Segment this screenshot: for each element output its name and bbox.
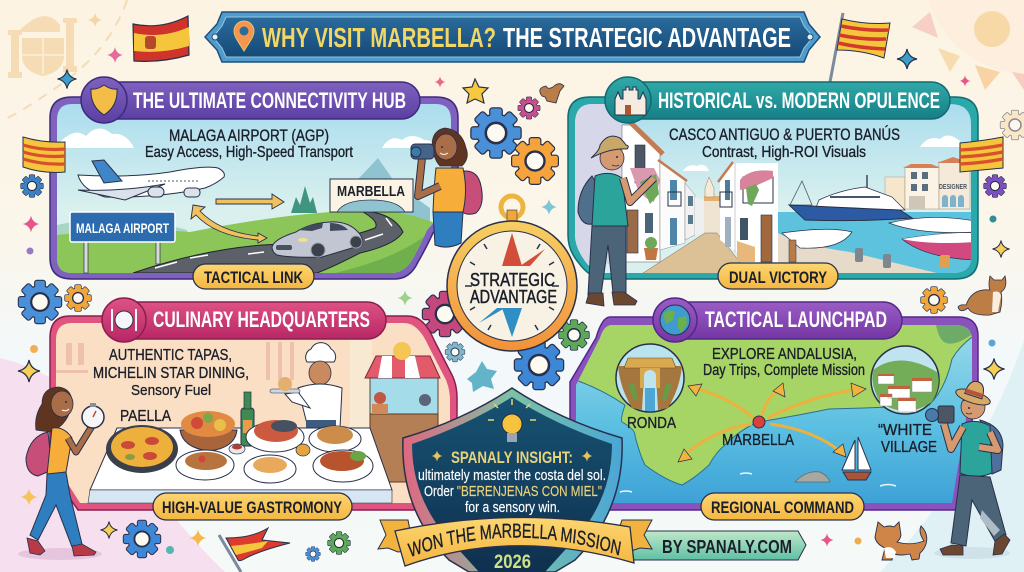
table bbox=[88, 428, 392, 503]
pill: regional command: REGIONAL COMMAND bbox=[711, 498, 854, 517]
panel: connectivity hub: Easy Access, High-Speed Transport bbox=[145, 144, 354, 161]
sign: Marbella: MARBELLA bbox=[337, 184, 405, 200]
heading text: CASCO ANTIGUO & PUERTO BANÚS bbox=[669, 125, 900, 144]
pill: high-value gastronomy bbox=[153, 493, 352, 520]
flag: Catalan left bbox=[23, 137, 65, 172]
chef bbox=[270, 343, 342, 430]
sign: Marbella bbox=[330, 179, 413, 212]
coat of arms watermark bbox=[8, 16, 77, 78]
panel: culinary headquarters: MICHELIN STAR DINING, bbox=[93, 365, 249, 382]
callout: spanaly insight shield: for a sensory win. bbox=[465, 500, 560, 516]
icon: map pin bbox=[234, 21, 254, 51]
compass bbox=[447, 196, 577, 351]
map labels: VILLAGE bbox=[881, 439, 937, 456]
traveler: woman with stopwatch bbox=[18, 387, 104, 560]
pill: dual victory bbox=[718, 263, 838, 289]
pill: dual victory: DUAL VICTORY bbox=[729, 268, 828, 287]
route arrows bbox=[682, 388, 860, 458]
traveler: guide with hat bbox=[578, 136, 654, 306]
map labels: RONDA bbox=[627, 415, 676, 432]
map labels: MARBELLA bbox=[722, 432, 794, 449]
callout: spanaly insight shield bbox=[403, 388, 622, 572]
compass: STRATEGIC bbox=[470, 269, 555, 290]
cat: top right bbox=[958, 276, 1006, 315]
insight text: SPANALY INSIGHT: bbox=[451, 448, 573, 467]
banner: won the marbella mission: WON THE MARBELLA MISSION bbox=[407, 524, 621, 556]
header pill bbox=[653, 298, 902, 342]
map labels: “WHITE bbox=[878, 422, 932, 439]
heading text: EXPLORE ANDALUSIA, bbox=[712, 346, 857, 363]
ribbon: by spanaly.com bbox=[625, 531, 806, 560]
heading text: AUTHENTIC TAPAS, bbox=[109, 347, 232, 364]
title text: WHY VISIT MARBELLA? bbox=[262, 22, 496, 53]
callout: spanaly insight shield: ultimately master the costa del sol. bbox=[418, 468, 606, 484]
pill: tactical link bbox=[193, 264, 314, 289]
heading text: MALAGA AIRPORT (AGP) bbox=[169, 127, 329, 145]
flag: Spain bottom pennant bbox=[219, 528, 290, 572]
header pill: THE ULTIMATE CONNECTIVITY HUB bbox=[133, 88, 406, 113]
pill: high-value gastronomy: HIGH-VALUE GASTROMONY bbox=[162, 498, 343, 517]
flag: Catalan right bbox=[960, 137, 1003, 172]
panel: tactical launchpad bbox=[570, 298, 980, 520]
icon: lightbulb bbox=[488, 399, 536, 442]
map inset: ronda bbox=[616, 344, 684, 412]
panel: culinary headquarters: Sensory Fuel bbox=[131, 382, 211, 399]
pill: regional command bbox=[701, 493, 864, 520]
compass: ADVANTAGE bbox=[470, 286, 557, 307]
panel: culinary headquarters: PAELLA bbox=[120, 408, 172, 425]
marina bbox=[778, 157, 975, 275]
panel: connectivity hub bbox=[50, 77, 460, 289]
panel: tactical launchpad: Day Trips, Complete Mission bbox=[703, 362, 865, 379]
panel: historical vs modern bbox=[568, 77, 978, 289]
food bbox=[106, 392, 373, 483]
pill: tactical link: TACTICAL LINK bbox=[204, 268, 304, 287]
header pill: TACTICAL LAUNCHPAD bbox=[705, 307, 887, 332]
ribbon: by spanaly.com: BY SPANALY.COM bbox=[662, 537, 792, 557]
sailboat bbox=[842, 437, 871, 480]
cat: bottom bbox=[875, 522, 927, 560]
map inset: white village bbox=[871, 346, 939, 414]
marbella dot bbox=[753, 416, 765, 428]
plane bbox=[78, 160, 224, 200]
rock bbox=[795, 472, 830, 482]
sign: Malaga Airport bbox=[70, 212, 175, 273]
sign: Malaga Airport: MALAGA AIRPORT bbox=[76, 221, 170, 236]
header pill bbox=[102, 298, 386, 342]
title banner: THE STRATEGIC ADVANTAGE bbox=[503, 22, 791, 53]
callout: spanaly insight shield: Order "BERENJENAS CON MIEL" bbox=[424, 484, 602, 500]
decorative gears bbox=[19, 97, 1024, 561]
header pill bbox=[81, 77, 420, 123]
storefront label: DESIGNER bbox=[939, 182, 967, 191]
traveler: photographer bbox=[411, 128, 482, 247]
stall bbox=[365, 342, 440, 482]
panel: culinary headquarters bbox=[50, 298, 457, 520]
header pill bbox=[605, 77, 950, 123]
old town bbox=[622, 122, 778, 275]
road bbox=[133, 212, 403, 273]
trees bbox=[291, 186, 317, 213]
clouds bbox=[920, 135, 960, 147]
map labels bbox=[627, 415, 937, 456]
flag: Catalan top right with pole bbox=[830, 13, 890, 82]
hills bbox=[57, 212, 434, 273]
title banner bbox=[205, 12, 820, 62]
header pill: CULINARY HEADQUARTERS bbox=[153, 307, 370, 332]
panel: historical vs modern: Contrast, High-ROI Visuals bbox=[702, 144, 866, 161]
traveler: man with camera bbox=[926, 376, 1010, 559]
critter: squirrel bbox=[540, 84, 564, 103]
car bbox=[272, 222, 362, 257]
land bbox=[570, 320, 975, 485]
clouds and mountains bbox=[57, 128, 432, 235]
flag: Spain top bbox=[133, 16, 189, 61]
banner: won the marbella mission bbox=[377, 516, 653, 567]
arrows bbox=[191, 194, 284, 243]
